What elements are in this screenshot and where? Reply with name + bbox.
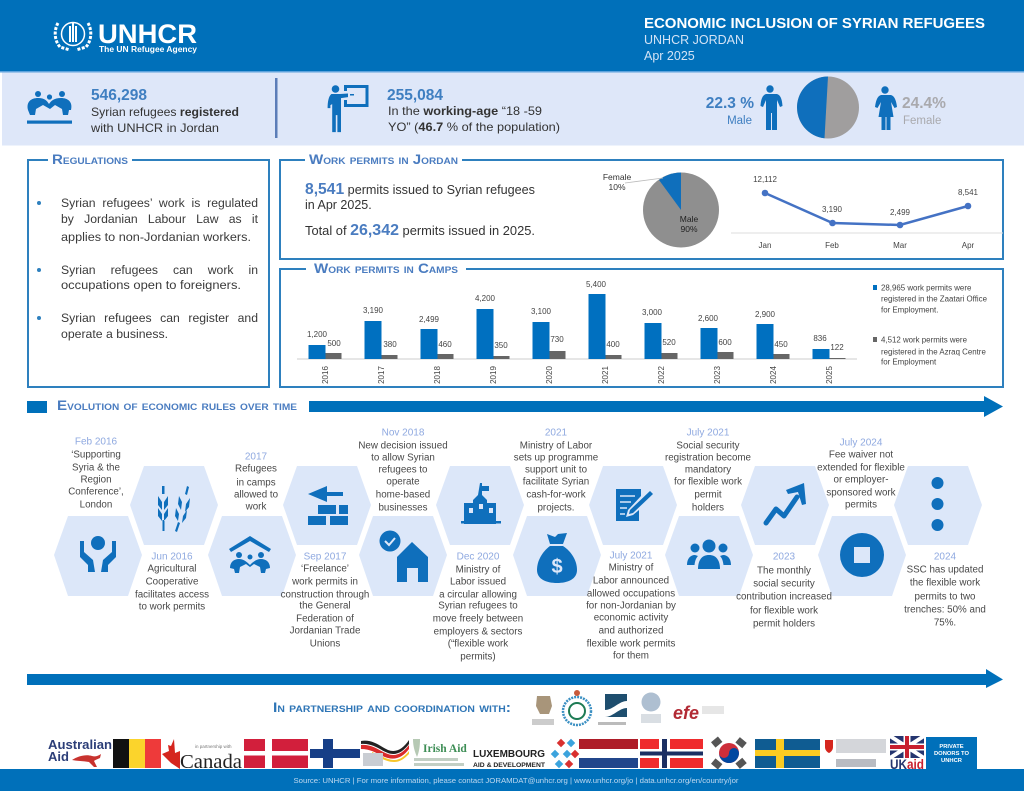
stat: registered refugees: with UNHCR in Jordan <box>90 121 219 135</box>
line chart: monthly permits: 2,499 <box>890 208 911 217</box>
line chart: monthly permits: 8,541 <box>958 188 979 197</box>
milestone: 2023: contribution increased <box>736 592 832 602</box>
bar chart: permits by year: 2018 <box>433 366 442 384</box>
milestone: 2024: permits to two <box>915 592 976 602</box>
icon: woman <box>875 86 897 130</box>
icon: school building <box>461 483 501 524</box>
bar chart: permits by year: 500 <box>327 339 341 348</box>
legend: Zaatari office: registered in the Zaatari Office <box>881 294 988 304</box>
milestone: Jun 2016 <box>135 552 209 612</box>
regulation 2 <box>37 263 258 292</box>
milestone: Sep 2017 <box>281 552 369 650</box>
bar chart: permits by year: 2023 <box>713 366 722 384</box>
bar chart: permits by year: 2020 <box>545 366 554 384</box>
milestone: Nov 2018: refugees to <box>378 464 428 476</box>
logo wordmark: UNHCR <box>98 19 197 49</box>
bar chart: permits by year: 2019 <box>489 366 498 384</box>
logo: Luxembourg aid: AID & DEVELOPMENT <box>473 762 545 769</box>
milestone: July 2024 <box>817 438 905 510</box>
milestone: Nov 2018: Nov 2018 <box>382 428 425 438</box>
bar chart: permits by year: 2016 <box>321 366 330 384</box>
milestone: 2017: 2017 <box>245 452 268 462</box>
legend: Zaatari office: for Employment. <box>881 306 938 314</box>
key figures band <box>2 72 1024 146</box>
stat: female share: 24.4% <box>902 95 946 112</box>
logo: Swiss agency <box>825 739 886 767</box>
line chart: monthly permits: Feb <box>825 241 839 250</box>
stat: working-age refugees <box>387 87 560 134</box>
milestone: Dec 2020: Syrian refugees to <box>438 600 518 612</box>
bar chart: permits by year: 2,900 <box>755 310 776 319</box>
milestone: 2021 programme unit: cash-for-work <box>526 490 586 500</box>
report title <box>644 15 985 63</box>
legend: Azraq centre: registered in the Azraq Centre <box>881 348 986 356</box>
pie chart: permits by gender: Male <box>680 214 698 224</box>
pie: gender split <box>797 76 859 138</box>
timeline hexagons and icons <box>54 466 982 596</box>
milestone: 2017: allowed to <box>234 490 279 500</box>
icon: money bag: $ <box>551 556 563 578</box>
icon: person at board <box>328 85 368 132</box>
bar chart: permits by year: 2024 <box>769 366 778 384</box>
bar chart: permits by year: 2017 <box>377 366 386 384</box>
milestone: Jun 2016: Jun 2016 <box>151 552 193 562</box>
logo: Australian Aid: Aid <box>48 749 69 764</box>
header banner <box>0 0 1024 72</box>
milestone: Dec 2020: a circular allowing <box>439 590 517 600</box>
milestone: 2021 programme unit: support unit to <box>525 464 588 476</box>
milestone: 2024 <box>904 552 986 628</box>
milestone: Jun 2016: Agricultural <box>147 564 197 574</box>
milestone: July 2021 occupations <box>586 550 676 662</box>
bar chart: permits by year <box>297 280 857 384</box>
milestone: 2024: 75%. <box>934 618 956 628</box>
milestone: July 2024: permits <box>845 500 877 510</box>
text: permits issued: Total of 26,342 permits issued in 2025. <box>305 222 535 239</box>
milestone: July 2021 social security: Social security <box>676 440 740 452</box>
arrow: timeline bottom <box>27 669 1003 688</box>
stat: male share: Male <box>727 115 752 127</box>
milestone: Sep 2017: work permits in <box>291 576 358 588</box>
milestone: July 2021 social security <box>665 428 752 514</box>
logo: Canada <box>162 739 242 773</box>
logo: Canada: in partnership with <box>195 744 232 749</box>
stat: registered refugees: Syrian refugees registered <box>91 105 239 119</box>
milestone: Jun 2016: facilitates access <box>135 590 209 600</box>
regulation 3 <box>37 311 258 341</box>
regulation 2: Syrian refugees can work in <box>61 263 258 277</box>
line chart: monthly permits: Jan <box>759 241 771 250</box>
report title: ECONOMIC INCLUSION OF SYRIAN REFUGEES <box>644 15 985 32</box>
line chart: monthly permits: Apr <box>962 241 975 250</box>
milestone: 2017 <box>234 452 279 512</box>
icon: man <box>760 85 782 130</box>
milestone: 2023: The monthly <box>757 566 811 576</box>
logo: private donors: UNHCR <box>941 758 963 764</box>
bar chart: permits by year: 350 <box>494 341 508 350</box>
panel: work permits in camps <box>280 261 1003 387</box>
legend: Azraq centre: 4,512 work permits were <box>881 336 968 344</box>
logo: Jordan crest <box>532 696 554 725</box>
milestone: 2023: for flexible work <box>750 606 818 616</box>
stat: male share <box>706 95 754 127</box>
line chart: monthly permits: 3,190 <box>822 205 843 214</box>
milestone: 2021 programme unit <box>514 428 599 514</box>
bar chart: permits by year: 460 <box>438 340 452 349</box>
logo tagline: The UN Refugee Agency <box>99 44 197 54</box>
line chart: monthly permits: 12,112 <box>753 175 777 184</box>
milestone: Feb 2016: Conference’, <box>68 486 124 498</box>
arrow: timeline top <box>309 396 1003 417</box>
pie chart: permits by gender: 10% <box>608 182 626 192</box>
milestone: 2017: in camps <box>236 478 276 488</box>
footer: Source: UNHCR | For more information, please contact JORAMDAT@unhcr.org | www.unhcr.org/jo | data.unhcr.org/en/country/jor <box>294 776 739 785</box>
milestone: 2024: trenches: 50% and <box>904 604 986 616</box>
legend: Zaatari office <box>873 284 988 314</box>
milestone: July 2021 occupations: economic activity <box>594 612 668 624</box>
milestone: July 2021 occupations: flexible work permits <box>587 638 675 650</box>
bar chart: permits by year: 3,100 <box>531 307 552 316</box>
milestone: 2023: 2023 <box>773 552 796 562</box>
regulation 1: applies to non-Jordanian workers. <box>61 230 251 244</box>
legend: Azraq centre <box>873 336 986 366</box>
milestone: Nov 2018: to allow Syrian <box>371 452 435 464</box>
bar chart: permits by year: 5,400 <box>586 280 607 289</box>
line chart: monthly permits: Mar <box>893 241 907 250</box>
bar chart: permits by year: 2021 <box>601 366 610 384</box>
bar chart: permits by year: 4,200 <box>475 294 496 303</box>
milestone: 2024: 2024 <box>934 552 957 562</box>
milestone: July 2021 social security: mandatory <box>685 464 731 476</box>
milestone: July 2021 social security: for flexible work <box>674 476 742 488</box>
milestone: 2023: social security <box>753 578 815 590</box>
icon: hands holding <box>80 536 116 572</box>
milestone: Dec 2020: Labor issued <box>450 576 506 588</box>
bar chart: permits by year: 3,190 <box>363 306 384 315</box>
logo: Luxembourg aid: LUXEMBOURG <box>473 748 545 760</box>
icon: money bag <box>537 533 577 583</box>
regulation 3: operate a business. <box>61 327 168 341</box>
timeline heading bar <box>27 396 1003 417</box>
marker square <box>27 401 47 413</box>
milestone: July 2024: sponsored work <box>826 488 896 498</box>
milestone: Feb 2016: Feb 2016 <box>75 436 118 448</box>
panel: regulations <box>28 152 269 387</box>
bar chart: permits by year: 450 <box>774 340 788 349</box>
bar chart: permits by year: 2025 <box>825 366 834 384</box>
logo: social security <box>598 694 627 725</box>
UNHCR logo <box>55 19 197 54</box>
milestone: 2021 programme unit: projects. <box>537 502 575 514</box>
bar chart: permits by year: 836 <box>813 334 827 343</box>
milestone: 2023 <box>736 552 832 630</box>
milestone: 2021 programme unit: sets up programme <box>514 452 599 464</box>
icon: document and pen <box>616 489 653 521</box>
flag: Finland <box>310 739 360 768</box>
logo: private donors <box>926 737 977 769</box>
milestone: Nov 2018 <box>358 428 448 514</box>
text: permits issued: in Apr 2025. <box>305 198 372 212</box>
pie chart: permits by gender: 90% <box>680 224 698 234</box>
stat: working-age refugees: In the working-age “18 -59 <box>388 104 542 118</box>
bar chart: permits by year: 2,499 <box>419 315 440 324</box>
stat: registered refugees <box>90 87 239 135</box>
flag: South Korea <box>711 736 747 770</box>
report title: UNHCR JORDAN <box>644 33 744 47</box>
text: permits issued <box>305 181 535 239</box>
pie chart: permits by gender: Female <box>603 172 631 182</box>
logo: German cooperation <box>361 740 409 766</box>
heading: work permits in camps: Work permits in Camps <box>314 261 458 276</box>
flag: Belgium <box>113 739 161 768</box>
stat: female share: Female <box>903 115 941 127</box>
milestone: July 2024: Fee waiver not <box>829 450 893 460</box>
milestone: Nov 2018: operate <box>386 476 420 488</box>
milestone: Feb 2016: Syria & the <box>72 462 121 474</box>
icon: stop button <box>840 533 884 577</box>
milestone: Sep 2017: Jordanian Trade <box>290 626 361 636</box>
milestone: Feb 2016 <box>68 436 124 510</box>
milestone: July 2021 occupations: and authorized <box>599 626 663 636</box>
text: permits issued: 8,541 permits issued to Syrian refugees <box>305 181 535 198</box>
milestone: July 2021 social security: holders <box>692 502 724 514</box>
icon: rising trend arrow <box>766 483 806 523</box>
milestone: Dec 2020 <box>433 552 523 662</box>
milestone: 2021 programme unit: Ministry of Labor <box>520 440 593 452</box>
logo: EFE: efe <box>673 703 699 723</box>
icon: house with check <box>380 530 428 582</box>
bar chart: permits by year: 730 <box>550 335 564 344</box>
milestone: July 2021 social security: permit <box>694 490 722 500</box>
stat: working-age refugees: 255,084 <box>387 87 443 104</box>
milestone: Feb 2016: ‘Supporting <box>71 450 121 460</box>
bar chart: permits by year: 520 <box>662 338 676 347</box>
flag: Denmark <box>244 739 308 768</box>
milestone: Jun 2016: to work permits <box>139 602 205 612</box>
regulation 1: Syrian refugees’ work is regulated <box>61 196 258 210</box>
milestone: July 2024: or employer- <box>834 474 888 486</box>
flag: Norway <box>640 739 703 768</box>
milestone: Jun 2016: Cooperative <box>146 576 199 588</box>
flag: Sweden <box>755 739 820 768</box>
milestone: July 2021 occupations: Ministry of <box>609 562 654 574</box>
logo: ILO <box>641 692 661 723</box>
milestone: 2023: permit holders <box>753 618 815 630</box>
milestone: July 2021 social security: July 2021 <box>687 428 730 438</box>
logo: private donors: PRIVATE <box>939 744 964 750</box>
donor logos <box>48 736 977 773</box>
milestone: 2017: Refugees <box>235 464 277 474</box>
milestone: July 2021 occupations: for non-Jordanian by <box>586 600 676 612</box>
milestone: Dec 2020: (“flexible work <box>448 638 508 650</box>
milestone: Sep 2017: Federation of <box>296 614 354 624</box>
legend: Azraq centre: for Employment <box>881 358 937 366</box>
milestone: July 2024: July 2024 <box>840 438 883 448</box>
bar chart: permits by year: 600 <box>718 338 732 347</box>
partner logos <box>532 690 724 725</box>
milestone: 2021 programme unit: 2021 <box>545 428 568 438</box>
stat: working-age refugees: YO” (46.7 % of the population) <box>388 120 560 134</box>
logo: Luxembourg star <box>551 739 579 768</box>
milestone: Feb 2016: London <box>80 500 112 510</box>
bar chart: permits by year: 122 <box>830 343 844 352</box>
icon: trowel and bricks <box>308 486 348 525</box>
logo: EFE <box>673 703 724 723</box>
logo: Irish Aid: Irish Aid <box>423 743 467 755</box>
heading: regulations: Regulations <box>52 152 128 167</box>
milestone: Nov 2018: businesses <box>378 502 428 514</box>
milestone: Nov 2018: home-based <box>376 490 430 500</box>
stat: registered refugees: 546,298 <box>91 87 147 104</box>
icon: family under roof <box>229 536 271 573</box>
icon: group of people <box>687 540 731 569</box>
milestone: Feb 2016: Region <box>80 474 112 486</box>
logo: UK aid: UKaid <box>890 756 924 772</box>
hexagons <box>54 466 982 596</box>
pie chart: permits by gender <box>603 172 719 248</box>
line chart: monthly permits <box>731 175 1003 250</box>
milestone: Dec 2020: permits) <box>460 652 496 662</box>
report title: Apr 2025 <box>644 49 695 63</box>
milestone: Dec 2020: Dec 2020 <box>457 552 500 562</box>
logo: UK aid <box>890 736 924 772</box>
regulation 1 <box>37 196 258 244</box>
heading: evolution of economic rules: Evolution of economic rules over time <box>57 398 297 413</box>
milestone: Sep 2017: ‘Freelance’ <box>301 564 349 574</box>
logo: Canada: Canada <box>180 751 242 773</box>
milestone: Nov 2018: New decision issued <box>358 440 448 452</box>
milestone: July 2021 social security: registration become <box>665 452 752 464</box>
milestone: 2021 programme unit: facilitate Syrian <box>523 476 589 488</box>
footer <box>0 769 1024 791</box>
milestone: Dec 2020: move freely between <box>433 614 523 624</box>
bar chart: permits by year: 380 <box>383 340 397 349</box>
heading: partnership: In partnership and coordination with: <box>273 700 511 715</box>
milestone: 2024: the flexible work <box>910 578 980 588</box>
milestone: July 2021 occupations: Labor announced <box>593 576 669 586</box>
milestone: 2017: work <box>245 502 266 512</box>
icon: refugee family <box>27 91 72 124</box>
legend: Zaatari office: 28,965 work permits were <box>881 284 972 292</box>
bar chart: permits by year: 2,600 <box>698 314 719 323</box>
icon: three dots <box>932 477 944 531</box>
stat: male share: 22.3 % <box>706 95 754 112</box>
milestone: Sep 2017: Unions <box>310 638 340 650</box>
icon: wheat <box>158 486 190 532</box>
panel: work permits in Jordan <box>280 152 1003 259</box>
logo: Jordan chamber <box>563 690 591 725</box>
logo: Australian Aid: Australian <box>48 737 112 752</box>
milestone: July 2024: extended for flexible <box>817 462 905 474</box>
milestone: 2024: SSC has updated <box>907 564 983 576</box>
timeline milestones <box>68 428 986 662</box>
stat: female share <box>902 95 946 127</box>
milestone: Dec 2020: Ministry of <box>456 564 501 576</box>
milestone: July 2021 occupations: for them <box>613 650 649 662</box>
logo: Luxembourg aid <box>473 748 545 769</box>
logo: Irish Aid <box>413 739 467 766</box>
milestone: Sep 2017: the General <box>299 600 351 612</box>
logo emblem <box>55 22 91 50</box>
flag: Netherlands <box>579 739 638 768</box>
bar chart: permits by year: 3,000 <box>642 308 663 317</box>
regulation 3: Syrian refugees can register and <box>61 311 258 325</box>
regulation 2: occupations open to foreigners. <box>61 278 241 292</box>
milestone: July 2021 occupations: July 2021 <box>610 550 653 562</box>
bar chart: permits by year: 2022 <box>657 366 666 384</box>
bar chart: permits by year: 400 <box>606 340 620 349</box>
logo: Australian Aid <box>48 737 112 767</box>
logo: private donors: DONORS TO <box>934 751 969 757</box>
heading: work permits in Jordan: Work permits in Jordan <box>309 152 458 167</box>
milestone: Sep 2017: Sep 2017 <box>304 552 347 562</box>
milestone: Dec 2020: employers & sectors <box>434 626 522 638</box>
bar chart: permits by year: 1,200 <box>307 330 328 339</box>
milestone: Sep 2017: construction through <box>281 590 369 600</box>
regulation 1: by Jordanian Labour Law as it <box>61 212 258 226</box>
milestone: July 2021 occupations: allowed occupations <box>587 588 675 600</box>
